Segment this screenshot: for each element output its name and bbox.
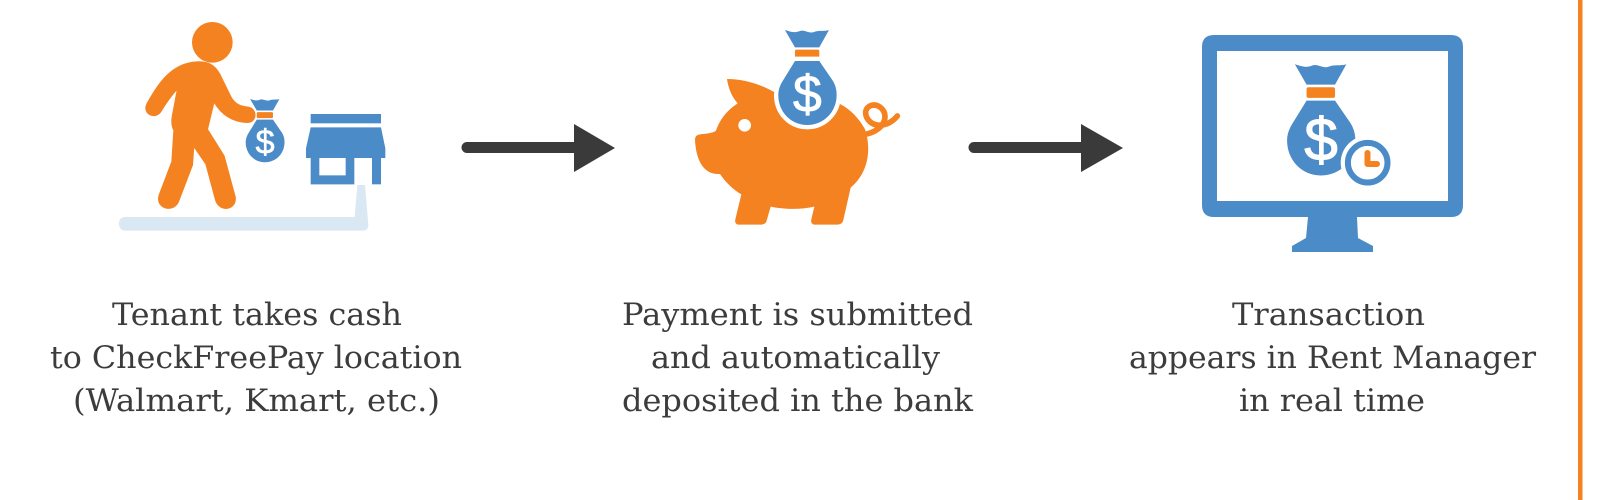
clock [1341, 136, 1395, 190]
text: step 3 caption [1129, 297, 1536, 419]
text: step 1 caption [50, 297, 462, 419]
icon: person walking to store with money bag [119, 22, 385, 231]
arrow: step 2 to step 3 [968, 124, 1123, 172]
icon: monitor with money bag and clock [1202, 35, 1463, 252]
pig tail [866, 105, 897, 134]
text: step 3 caption: appears in Rent Manager [1129, 340, 1536, 376]
text: step 2 caption: and automatically [651, 340, 940, 376]
icon: piggy bank with money bag [695, 30, 897, 225]
text: step 2 caption: deposited in the bank [622, 383, 973, 419]
panel: step 2 payment deposited [622, 30, 973, 419]
text: step 1 caption: to CheckFreePay location [50, 340, 462, 376]
arrow: step 1 to step 2 [462, 124, 615, 172]
text: step 2 caption [622, 297, 973, 419]
store [306, 114, 385, 184]
panel: step 1 tenant takes cash [50, 22, 462, 419]
text: step 1 caption: Tenant takes cash [112, 297, 402, 333]
pig eye [738, 119, 751, 132]
money bag [1287, 64, 1355, 175]
money bag: $ [793, 65, 822, 123]
text: step 1 caption: (Walmart, Kmart, etc.) [73, 383, 440, 419]
pig body [695, 79, 868, 225]
text: step 3 caption: Transaction [1232, 297, 1425, 333]
money bag: $ [255, 123, 275, 161]
money bag [246, 99, 285, 162]
monitor [1202, 35, 1463, 252]
money bag: $ [1304, 105, 1338, 173]
panel: step 3 transaction appears [1129, 35, 1536, 419]
text: step 2 caption: Payment is submitted [622, 297, 973, 333]
path to store [119, 185, 368, 231]
orange vertical divider [1578, 0, 1582, 500]
text: step 3 caption: in real time [1239, 383, 1425, 419]
person [146, 22, 255, 208]
money bag [778, 30, 837, 125]
